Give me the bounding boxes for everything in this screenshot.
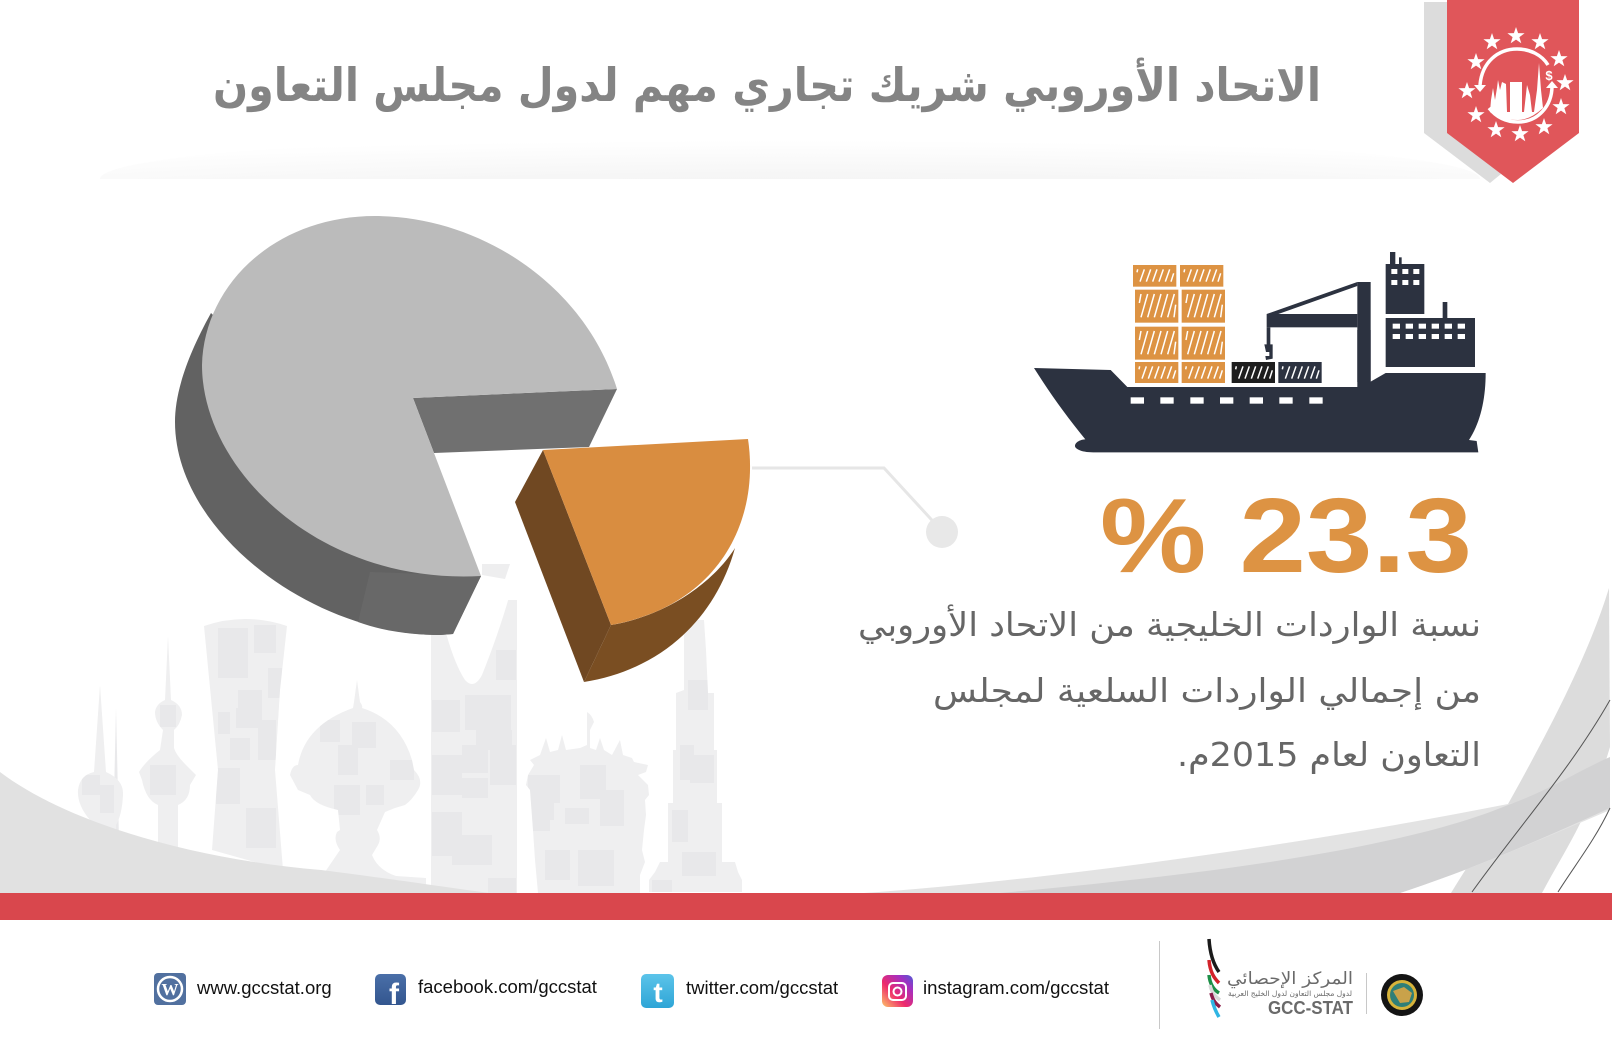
- red footer band: [0, 893, 1612, 920]
- city skyline silhouette: [78, 564, 742, 893]
- title fade strip: [60, 133, 1520, 229]
- icon: instagram: [882, 975, 913, 1007]
- footer: twitter link: [641, 974, 838, 1008]
- logo seal: [1381, 974, 1423, 1016]
- footer: twitter link: twitter.com/gccstat: [686, 977, 838, 998]
- footer divider: [1159, 941, 1160, 1029]
- logo text: المركز الإحصائي: [1227, 969, 1353, 989]
- icon: wordpress: [154, 973, 186, 1005]
- ship hull: [1034, 330, 1486, 452]
- container slashes: [1137, 269, 1319, 379]
- icon: cargo ship: [1034, 252, 1486, 452]
- footer: facebook link: facebook.com/gccstat: [418, 976, 597, 997]
- hull windows: [1131, 397, 1323, 404]
- icon: circular arrows and skyline: $: [1545, 68, 1553, 83]
- icon: twitter: t: [653, 977, 663, 1008]
- logo text: [1227, 969, 1353, 1018]
- logo text: لدول مجلس التعاون لدول الخليج العربية: [1228, 989, 1352, 998]
- footer: instagram link: [882, 975, 1110, 1007]
- dark containers: [1232, 362, 1322, 383]
- GCC-STAT logo: [1209, 939, 1423, 1018]
- description text: نسبة الواردات الخليجية من الاتحاد الأوروبي: [858, 604, 1481, 644]
- logo ribbon: [1209, 939, 1220, 1017]
- banner: grey shadow and red ribbon with logo: [1424, 0, 1579, 183]
- description text: [858, 604, 1481, 774]
- pie chart: grey remainder 76.7%: [175, 216, 617, 635]
- description text: التعاون لعام 2015م.: [1177, 735, 1481, 774]
- left background swoosh: [0, 772, 490, 893]
- title: الاتحاد الأوروبي شريك تجاري مهم لدول مجلس التعاون: [213, 57, 1321, 112]
- right background swooshes: [864, 588, 1610, 893]
- icon: twelve stars ring: [1458, 27, 1574, 141]
- icon: facebook: [375, 974, 406, 1011]
- icon: circular arrows and skyline: [1474, 49, 1558, 122]
- footer: website link: [154, 973, 332, 1005]
- logo text: GCC-STAT: [1268, 998, 1353, 1018]
- footer: website link: www.gccstat.org: [196, 977, 332, 998]
- connector line with dot: [752, 468, 958, 548]
- footer: facebook link: [375, 974, 597, 1011]
- icon: facebook: f: [389, 978, 400, 1011]
- big percentage: % 23.3: [1100, 477, 1472, 595]
- icon: wordpress: W: [162, 980, 178, 999]
- footer: instagram link: instagram.com/gccstat: [923, 977, 1110, 998]
- description text: من إجمالي الواردات السلعية لمجلس: [933, 671, 1481, 711]
- orange containers: [1133, 265, 1225, 383]
- crane: [1264, 282, 1371, 382]
- bridge towers: [1386, 252, 1475, 367]
- icon: twitter: [641, 974, 674, 1008]
- pie chart: orange exploded slice 23.3%: [515, 439, 750, 682]
